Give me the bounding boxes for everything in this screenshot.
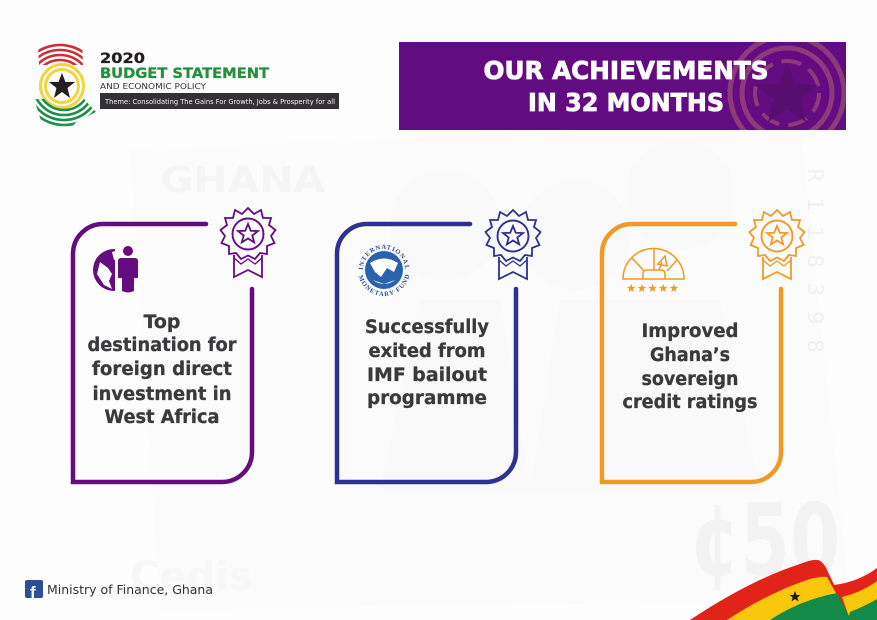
icon: IMF seal: MONETARY FUND [358,274,409,296]
text: FDI: destination for [88,335,237,356]
text: FDI: West Africa [104,407,220,428]
green arcs [35,99,96,126]
banknote watermark: GHANA [160,160,325,201]
icon: globe and businessman [93,245,143,297]
text: credit ratings: Ghana’s [650,345,730,366]
banknote watermark: Cedis [130,554,253,600]
logo text [100,51,339,109]
text: IMF: exited from [368,341,486,362]
logo text: AND ECONOMIC POLICY [100,82,206,91]
text: IMF: IMF bailout [367,365,487,386]
text: IMF: programme [367,388,487,409]
banknote watermark: R118398 [803,168,827,368]
text: credit ratings [622,321,758,413]
icon: rating gauge [623,248,684,295]
text: FDI: foreign direct [92,359,232,380]
card outline [73,224,252,482]
map star [49,73,75,98]
icon: award badge [220,208,276,277]
icon: IMF seal: INTERNATIONAL [358,244,410,270]
yellow rings [40,64,84,108]
banner text: OUR ACHIEVEMENTS [484,56,768,85]
panel: FDI [73,208,275,482]
icon: facebook: f [30,583,36,602]
panel: credit ratings [602,210,804,482]
flag star [790,591,800,602]
text: credit ratings: Improved [642,321,738,342]
card outline [602,224,781,482]
icon: award badge [486,210,540,279]
logo text: BUDGET STATEMENT [100,66,269,82]
text: FDI: investment in [92,384,232,405]
title banner: IN 32 MONTHS [528,88,724,117]
panel: IMF [334,208,542,484]
logo: Ghana map [35,44,96,126]
icon: rating gauge: ★★★★★ [626,281,679,295]
text: credit ratings: sovereign [642,369,738,390]
title banner [399,42,846,130]
red arcs [38,44,83,65]
icon: award badge [750,210,804,279]
footer: Facebook credit: Ministry of Finance, Ghana [47,582,213,597]
text: credit ratings: credit ratings [622,392,758,413]
logo text: 2020 [100,51,145,67]
banner rings [728,42,846,130]
icon: facebook [25,580,43,602]
text: FDI [88,312,237,428]
text: FDI: Top [144,312,180,333]
Ghana flag [690,560,877,620]
logo text: Theme: Consolidating The Gains For Growth, Jobs & Prosperity for all [104,98,335,106]
text: IMF [365,317,489,409]
icon: IMF seal [358,244,410,296]
banknote watermark [130,120,850,610]
card outline [337,224,516,482]
footer: Facebook credit [25,580,213,602]
text: IMF: Successfully [365,317,489,338]
